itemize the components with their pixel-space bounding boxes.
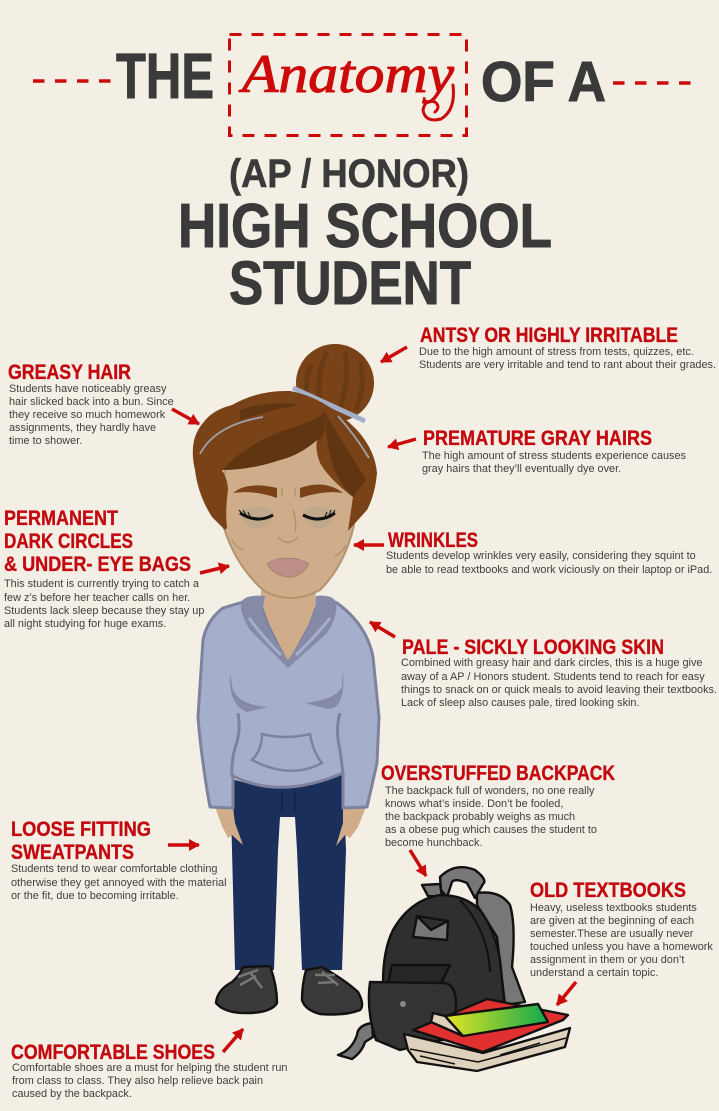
title <box>33 34 691 317</box>
green book <box>445 1004 548 1036</box>
bottom book pages <box>404 1028 570 1071</box>
callout: sweatpants: or the fit, due to becoming irritable. <box>11 890 179 902</box>
callout: pale skin: Lack of sleep also causes pale, tired looking skin. <box>401 697 640 709</box>
face <box>223 425 355 598</box>
callout: backpack: knows what’s inside. Don’t be fooled, <box>385 798 563 810</box>
collar highlights <box>249 618 330 655</box>
callout: gray hairs <box>422 427 686 475</box>
callout: sweatpants: otherwise they get annoyed with the material <box>11 877 227 889</box>
callout: greasy hair: Students have noticeably greasy <box>9 383 167 395</box>
backpack <box>338 867 570 1071</box>
arrow: dark circles <box>200 566 229 573</box>
callout: dark circles: PERMANENT <box>4 507 118 530</box>
arrow: wrinkles <box>354 543 384 547</box>
top book pages <box>431 1013 463 1036</box>
flourish on the script word <box>423 85 454 120</box>
callout: textbooks <box>530 879 713 979</box>
callout: greasy hair: assignments, they hardly have <box>9 422 156 434</box>
callout: backpack: the backpack probably weighs as much <box>385 811 575 823</box>
head <box>193 391 377 598</box>
callout: antsy: Due to the high amount of stress from tests, quizzes, etc. <box>419 346 694 358</box>
hair <box>193 391 377 531</box>
sleeve seams <box>232 713 343 777</box>
callout: pale skin: PALE - SICKLY LOOKING SKIN <box>402 636 664 659</box>
callout: textbooks: are given at the beginning of each <box>530 915 694 927</box>
callout: greasy hair: they receive so much homework <box>9 409 166 421</box>
callout: antsy: Students are very irritable and tend to rant about their grades. <box>419 359 716 371</box>
callout: textbooks: Heavy, useless textbooks students <box>530 902 697 914</box>
hair shading <box>222 403 366 497</box>
callout: gray hairs: The high amount of stress students experience causes <box>422 450 686 462</box>
dashed box <box>230 34 466 136</box>
callout: backpack: OVERSTUFFED BACKPACK <box>381 762 615 785</box>
arrow: textbooks <box>557 982 576 1005</box>
arrow: pale skin <box>370 622 395 637</box>
arrow: antsy <box>381 347 407 362</box>
drawstrings <box>282 792 295 812</box>
callout: sweatpants: LOOSE FITTING <box>11 818 151 841</box>
callout: shoes: caused by the backpack. <box>12 1088 132 1100</box>
callout: backpack: become hunchback. <box>385 837 482 849</box>
callout: dark circles: Students lack sleep because they stay up <box>4 605 204 617</box>
nose and wrinkles <box>232 488 346 556</box>
left shoe <box>216 966 277 1013</box>
grey strap <box>477 892 525 1005</box>
page lines <box>410 1038 566 1064</box>
bun <box>293 344 374 422</box>
callout: wrinkles: be able to read textbooks and work viciously on their laptop or iPad. <box>386 564 712 576</box>
callout: shoes: from class to class. They also help relieve back pain <box>12 1075 263 1087</box>
callout: gray hairs: gray hairs that they’ll eventually dye over. <box>422 463 621 475</box>
flap <box>388 965 450 985</box>
title dashes left <box>33 79 111 83</box>
neck and chest <box>260 585 316 668</box>
callout: antsy: ANTSY OR HIGHLY IRRITABLE <box>420 324 678 347</box>
callout: wrinkles <box>386 529 712 576</box>
books <box>404 999 570 1071</box>
callout: gray hairs: PREMATURE GRAY HAIRS <box>423 427 652 450</box>
HIGH SCHOOL: HIGH SCHOOL <box>178 192 552 261</box>
callout: backpack: as a obese pug which causes the student to <box>385 824 597 836</box>
callout: dark circles: & UNDER- EYE BAGS <box>4 553 191 576</box>
callout: textbooks: understand a certain topic. <box>530 967 658 979</box>
callout: pale skin: Combined with greasy hair and dark circles, this is a huge give <box>401 657 702 669</box>
arrow: backpack <box>410 850 426 876</box>
front pocket <box>369 982 456 1050</box>
callout: shoes: COMFORTABLE SHOES <box>11 1041 215 1064</box>
eyelashes <box>239 510 335 519</box>
callout: dark circles: all night studying for huge exams. <box>4 618 166 630</box>
OF A: OF A <box>481 50 606 114</box>
handle <box>422 867 484 898</box>
Anatomy: Anatomy <box>239 44 454 104</box>
callout: backpack: The backpack full of wonders, no one really <box>385 785 595 797</box>
right hand <box>336 807 366 846</box>
callout: greasy hair: time to shower. <box>9 435 82 447</box>
callout: dark circles: DARK CIRCLES <box>4 530 133 553</box>
callout: dark circles <box>4 507 204 630</box>
student figure <box>193 344 379 1014</box>
callout: pale skin <box>401 636 717 709</box>
callout: greasy hair <box>8 361 174 447</box>
envelope pocket <box>413 916 448 940</box>
callout: sweatpants: Students tend to wear comfortable clothing <box>11 863 217 875</box>
bust shadows <box>230 670 343 712</box>
callout: greasy hair: GREASY HAIR <box>8 361 131 384</box>
callout: textbooks: touched unless you have a homework <box>530 941 713 953</box>
shoe details <box>238 970 338 988</box>
STUDENT: STUDENT <box>229 249 471 317</box>
eye bags <box>240 506 335 529</box>
hoodie <box>198 596 379 808</box>
callout: sweatpants <box>11 818 227 902</box>
right shoe <box>302 967 362 1014</box>
pack body <box>383 895 505 1040</box>
lips <box>267 558 309 577</box>
callout: textbooks: assignment in them or you don’t <box>530 954 684 966</box>
gray hairs <box>200 416 369 458</box>
callout: shoes <box>11 1041 287 1100</box>
callout: textbooks: OLD TEXTBOOKS <box>530 879 686 902</box>
pocket <box>252 734 322 771</box>
callout: textbooks: semester.These are usually never <box>530 928 694 940</box>
callout: wrinkles: WRINKLES <box>388 529 478 552</box>
arrow: greasy hair <box>172 409 199 424</box>
red cover <box>413 999 568 1052</box>
callout: sweatpants: SWEATPANTS <box>11 841 134 864</box>
arrow: shoes <box>223 1029 243 1052</box>
arrow: sweatpants <box>168 843 199 847</box>
zipper <box>460 900 490 972</box>
title dashes right <box>613 81 691 85</box>
hood collar right <box>288 596 336 668</box>
callout: backpack <box>381 762 615 849</box>
eyebrows <box>233 484 343 498</box>
callout: antsy <box>419 324 716 371</box>
callout: pale skin: things to snack on or quick meals to avoid leaving their textbooks. <box>401 684 717 696</box>
callout: dark circles: This student is currently trying to catch a <box>4 578 200 590</box>
callout: wrinkles: Students develop wrinkles very easily, considering they squint to <box>386 550 696 562</box>
callout: dark circles: few z’s before her teacher calls on her. <box>4 592 190 604</box>
loose strap <box>338 1023 373 1059</box>
THE: THE <box>116 40 214 112</box>
hood collar left <box>241 596 288 668</box>
button <box>400 1001 406 1007</box>
callout: shoes: Comfortable shoes are a must for helping the student run <box>12 1062 287 1074</box>
legs and pants <box>230 773 346 970</box>
arrow: gray hairs <box>388 439 416 447</box>
left hand <box>215 807 243 845</box>
callout: greasy hair: hair slicked back into a bun. Since <box>9 396 174 408</box>
arrows <box>168 347 576 1052</box>
AP / HONOR: (AP / HONOR) <box>229 152 469 196</box>
callout: pale skin: away of a AP / Honors student. Students tend to reach for easy <box>401 671 705 683</box>
